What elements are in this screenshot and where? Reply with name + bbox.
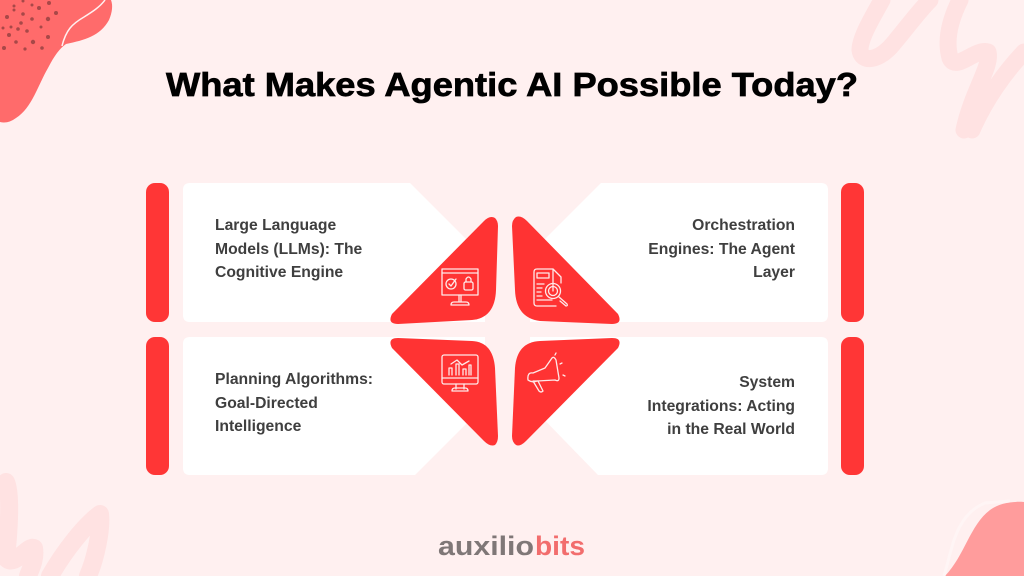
- accent bar: right top: [841, 183, 864, 322]
- triangle: bottom left: [390, 338, 498, 446]
- accent bar: left bottom: [146, 337, 169, 475]
- icon: monitor with bar chart: [442, 355, 478, 391]
- accent bar: left top: [146, 183, 169, 322]
- card: left top: [183, 183, 485, 322]
- text: Orchestration Engines: Engines: The Agent: [648, 241, 796, 258]
- text: Large Language Models: Large Language: [215, 217, 336, 234]
- text: Orchestration Engines: Orchestration: [692, 217, 795, 234]
- icon: megaphone: [528, 353, 565, 392]
- panel: Planning Algorithms: [146, 337, 485, 475]
- icon: monitor with check and lock: [442, 269, 478, 305]
- text: System Integrations: System: [739, 374, 795, 391]
- card: right top: [530, 183, 828, 322]
- text: Large Language Models: Cognitive Engine: [215, 264, 343, 281]
- logo: auxiliobits: auxilio: [438, 531, 534, 561]
- text: Large Language Models: Models (LLMs): The: [215, 241, 363, 258]
- text: Planning Algorithms: Intelligence: [215, 418, 302, 435]
- card: left bottom: [183, 337, 485, 475]
- title: What Makes Agentic AI Possible Today?: [166, 66, 858, 103]
- decoration: top-right squiggle: [860, 0, 1024, 130]
- panel: System Integrations: [530, 337, 864, 475]
- panel: Large Language Models: [146, 183, 485, 322]
- text: System Integrations: in the Real World: [667, 421, 795, 438]
- logo: auxiliobits: [438, 531, 585, 561]
- accent bar: right bottom: [841, 337, 864, 475]
- logo: auxiliobits: bits: [535, 531, 585, 561]
- decoration: bottom-left squiggle: [6, 482, 100, 576]
- text: Orchestration Engines: Layer: [753, 264, 795, 281]
- triangle: top right: [512, 216, 620, 324]
- icon: document with magnifier: [534, 269, 567, 306]
- card: right bottom: [530, 337, 828, 475]
- text: Planning Algorithms: Planning Algorithms:: [215, 371, 373, 388]
- panel: Orchestration Engines: [530, 183, 864, 322]
- triangle: top left: [390, 217, 498, 324]
- decoration: top-left blob: [0, 0, 112, 122]
- text: Planning Algorithms: Goal-Directed: [215, 395, 318, 412]
- text: System Integrations: Integrations: Acting: [647, 398, 795, 415]
- decoration: bottom-right blob: [944, 501, 1024, 576]
- triangle: bottom right: [512, 338, 620, 446]
